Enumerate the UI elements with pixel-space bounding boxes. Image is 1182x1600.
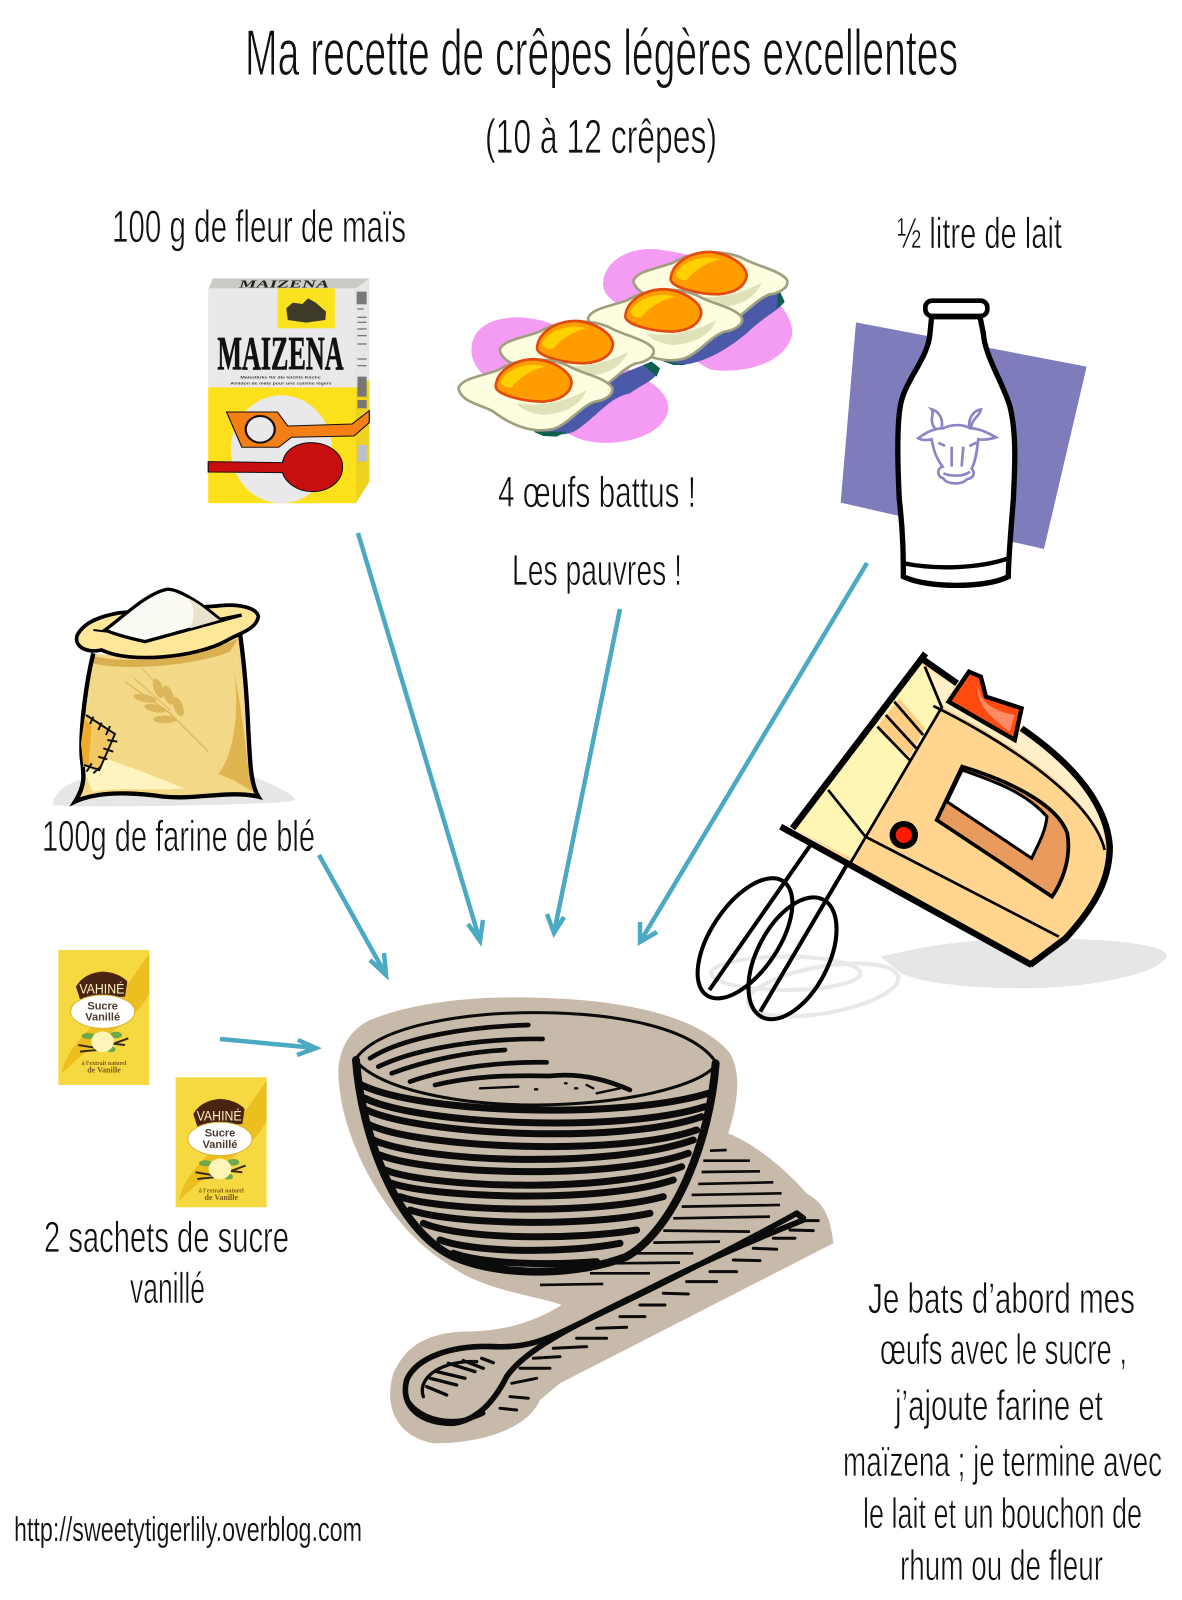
- icon: Maizena box: MAIZENA: [217, 328, 344, 380]
- icon: sack patch: [81, 715, 117, 773]
- ingredient label: vanilla sugar: vanillé: [130, 1264, 205, 1313]
- icon: vanilla sugar sachet 1: VAHINÉ: [79, 980, 124, 996]
- icon: vanilla sugar sachet 1: à l'extrait naturel: [82, 1061, 127, 1067]
- icon: Maizena box: [208, 278, 369, 503]
- arrow: sugar to bowl: [220, 1039, 316, 1055]
- icon: vanilla sugar sachet 2: de Vanille: [205, 1193, 238, 1202]
- icon: vanilla sugar sachet 1: [58, 950, 149, 1085]
- icon: Maizena box: Maisstärke für die leichte Küche: [240, 375, 321, 379]
- icon: Maizena box: MAIZENA: [237, 279, 329, 290]
- icon: flour sack: [53, 589, 295, 806]
- inner bowl stripes: [370, 1025, 630, 1090]
- ingredient label: milk: ½ litre de lait: [897, 209, 1062, 258]
- icon: vanilla sugar sachet 2: [176, 1077, 267, 1207]
- icon: vanilla sugar sachet 2: à l'extrait naturel: [199, 1188, 244, 1194]
- icon: vanilla sugar sachet 1: Vanillé: [85, 1012, 120, 1024]
- instructions text: [843, 1275, 1162, 1590]
- ingredient label: vanilla sugar: [44, 1213, 289, 1313]
- ingredient label: wheat flour: 100g de farine de blé: [42, 812, 315, 861]
- source url: http://sweetytigerlily.overblog.com: [14, 1511, 362, 1549]
- bowl body: [355, 1013, 717, 1272]
- icon: vanilla sugar sachet 1: de Vanille: [87, 1066, 121, 1075]
- icon: milk bottle: [841, 301, 1087, 585]
- arrow: milk to bowl: [640, 563, 867, 942]
- icon: hand mixer: [679, 653, 1167, 1033]
- arrow: eggs to bowl: [547, 609, 620, 933]
- subtitle: (10 à 12 crêpes): [485, 111, 717, 164]
- icon: wheat ear: [125, 668, 208, 752]
- icon: vanilla sugar sachet 2: Vanillé: [203, 1139, 237, 1151]
- icon: Maizena box: Amidon de maïs pour une cuisine légère: [230, 381, 333, 386]
- icon: bowl and spoon: [338, 997, 833, 1443]
- icon: vanilla sugar sachet 2: VAHINÉ: [197, 1108, 242, 1124]
- ingredient label: vanilla sugar: 2 sachets de sucre: [44, 1213, 289, 1262]
- icon: vanilla sugar sachet 1: Sucre: [87, 1000, 118, 1012]
- ingredient label: eggs: 4 œufs battus !: [498, 468, 696, 517]
- arrow: wheat flour to bowl: [319, 855, 386, 975]
- icon: fried eggs: [458, 249, 792, 443]
- arrow: corn flour to bowl: [358, 533, 483, 941]
- ingredient label: corn flour: 100 g de fleur de maïs: [112, 201, 406, 252]
- icon: vanilla sugar sachet 2: Sucre: [205, 1128, 235, 1140]
- caption: poor eggs: Les pauvres !: [512, 546, 682, 595]
- wooden spoon: [405, 1213, 818, 1423]
- table shadow hatching: [540, 1150, 782, 1285]
